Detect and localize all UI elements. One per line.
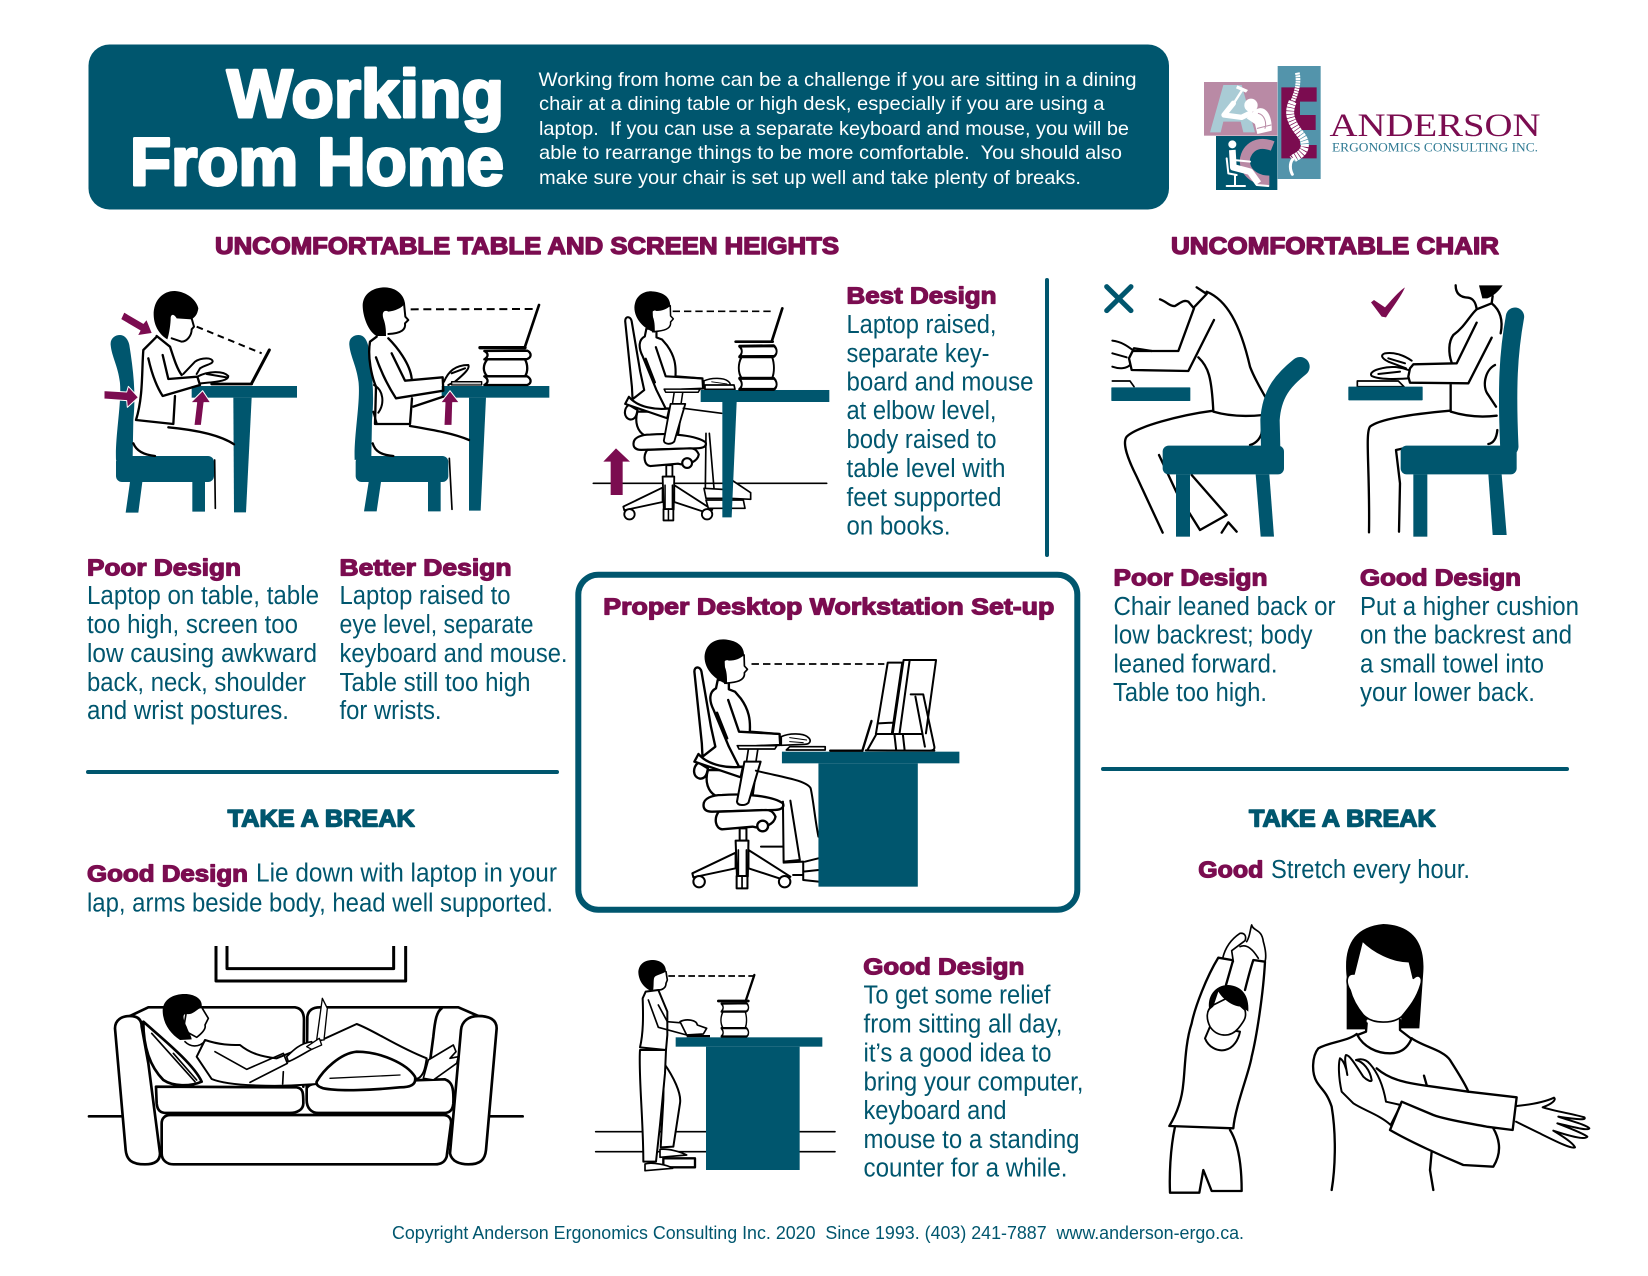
- text: lie down: Good Design: [87, 861, 248, 887]
- text: better design laptop: Laptop raised to: [340, 582, 510, 610]
- title: Working: [227, 56, 504, 132]
- text: best design: [846, 282, 1034, 540]
- text: better design laptop: eye level, separate: [340, 611, 534, 639]
- title: From Home: [130, 124, 504, 200]
- text: standing counter: mouse to a standing: [864, 1126, 1080, 1154]
- text: best design: Laptop raised,: [846, 311, 996, 339]
- text: best design: table level with: [846, 455, 1006, 483]
- text: poor chair: Poor Design: [1114, 564, 1268, 590]
- arrow: raise body: [603, 448, 630, 495]
- panel heading: Proper Desktop Workstation Set-up: [603, 593, 1054, 619]
- illustration: standing counter: [596, 960, 835, 1171]
- intro text: make sure your chair is set up well and take plenty of breaks.: [539, 167, 1081, 189]
- intro text: chair at a dining table or high desk, especially if you are using a: [539, 93, 1105, 115]
- text: best design: board and mouse: [846, 368, 1034, 396]
- text: good chair: Put a higher cushion: [1360, 593, 1579, 621]
- text: standing counter: Good Design: [863, 953, 1024, 979]
- logo: Anderson Ergonomics: ANDERSON: [1330, 108, 1541, 144]
- text: poor chair: [1113, 564, 1336, 707]
- text: best design: Best Design: [846, 282, 996, 308]
- arrow: wrist: [191, 391, 211, 425]
- text: good chair: Good Design: [1360, 564, 1521, 590]
- text: poor chair: Chair leaned back or: [1114, 593, 1336, 621]
- illustration: shoulder stretch: [1313, 924, 1589, 1190]
- text: good chair: your lower back.: [1360, 679, 1535, 707]
- icon: cross: [1107, 287, 1131, 311]
- text: lie down: [87, 860, 557, 918]
- heading: take a break right: TAKE A BREAK: [1249, 806, 1436, 833]
- arrow: wrist: [441, 391, 459, 425]
- footer copyright: Copyright Anderson Ergonomics Consulting Inc. 2020 Since 1993. (403) 241-7887 www.anderson-ergo.ca.: [392, 1223, 1244, 1243]
- text: stretch: Stretch every hour.: [1271, 856, 1470, 884]
- text: poor design laptop: back, neck, shoulder: [87, 669, 306, 697]
- text: good chair: on the backrest and: [1360, 622, 1572, 650]
- section heading: table and screen heights: UNCOMFORTABLE TABLE AND SCREEN HEIGHTS: [215, 233, 839, 260]
- text: stretch: Good: [1198, 857, 1263, 883]
- text: stretch: [1198, 856, 1470, 884]
- text: standing counter: [863, 953, 1084, 1182]
- text: standing counter: counter for a while.: [864, 1154, 1068, 1182]
- text: lie down: lap, arms beside body, head well supported.: [87, 890, 553, 918]
- text: lie down: Lie down with laptop in your: [256, 860, 557, 888]
- logo: Anderson Ergonomics: ERGONOMICS CONSULTING INC.: [1332, 141, 1538, 155]
- illustration: poor chair: [1111, 287, 1300, 537]
- text: good chair: a small towel into: [1360, 650, 1544, 678]
- icon: check mark: [1371, 287, 1405, 317]
- text: best design: on books.: [846, 512, 950, 540]
- intro text: able to rearrange things to be more comfortable. You should also: [539, 142, 1122, 164]
- intro text: Working from home can be a challenge if you are sitting in a dining: [538, 69, 1136, 91]
- text: standing counter: it’s a good idea to: [864, 1040, 1052, 1068]
- text: standing counter: keyboard and: [864, 1097, 1006, 1125]
- text: standing counter: To get some relief: [864, 982, 1051, 1010]
- panel: proper desktop workstation: [578, 575, 1077, 910]
- text: best design: at elbow level,: [846, 397, 996, 425]
- illustration: good chair: [1348, 285, 1517, 537]
- text: poor design laptop: [87, 554, 319, 725]
- illustration: desktop workstation: [692, 639, 959, 888]
- illustration: overhead stretch: [1169, 925, 1266, 1193]
- header banner: [88, 44, 1169, 210]
- heading: take a break left: TAKE A BREAK: [228, 806, 415, 833]
- illustration: best design: [593, 291, 829, 520]
- text: better design laptop: [340, 554, 568, 725]
- illustration: better design laptop raised: [349, 287, 549, 511]
- text: poor design laptop: Poor Design: [87, 554, 241, 580]
- text: better design laptop: keyboard and mouse.: [340, 640, 568, 668]
- text: best design: feet supported: [846, 484, 1002, 512]
- text: poor design laptop: too high, screen too: [87, 611, 298, 639]
- text: standing counter: bring your computer,: [864, 1068, 1084, 1096]
- text: poor design laptop: Laptop on table, table: [87, 582, 319, 610]
- arrow: back: [104, 386, 138, 407]
- section heading: chair: UNCOMFORTABLE CHAIR: [1171, 233, 1499, 260]
- text: poor chair: leaned forward.: [1114, 650, 1278, 678]
- intro text: laptop. If you can use a separate keyboard and mouse, you will be: [539, 118, 1129, 140]
- arrow: neck: [121, 312, 152, 336]
- text: best design: body raised to: [846, 426, 996, 454]
- text: standing counter: from sitting all day,: [864, 1010, 1062, 1038]
- text: better design laptop: Table still too high: [340, 669, 530, 697]
- text: good chair: [1360, 564, 1579, 707]
- text: poor chair: low backrest; body: [1114, 622, 1313, 650]
- logo: Anderson Ergonomics: [1204, 66, 1541, 190]
- illustration: poor design laptop on table: [104, 291, 297, 513]
- text: better design laptop: for wrists.: [340, 697, 442, 725]
- title: [130, 56, 504, 200]
- illustration: couch: [89, 946, 523, 1164]
- text: poor chair: Table too high.: [1113, 679, 1267, 707]
- text: poor design laptop: low causing awkward: [87, 640, 317, 668]
- text: poor design laptop: and wrist postures.: [87, 697, 289, 725]
- text: better design laptop: Better Design: [340, 554, 512, 580]
- text: best design: separate key-: [846, 340, 990, 368]
- intro text: [538, 69, 1136, 189]
